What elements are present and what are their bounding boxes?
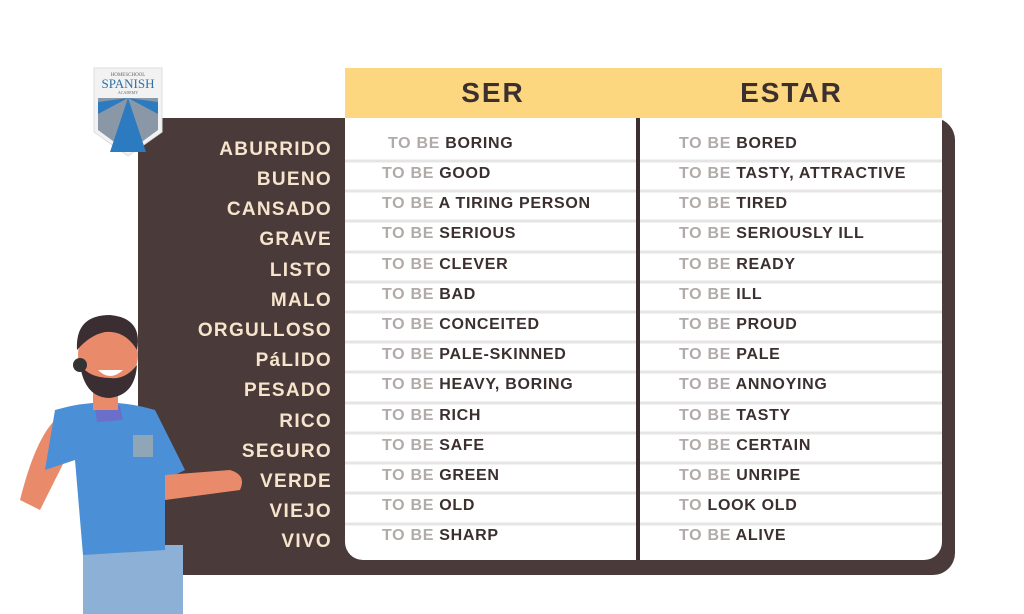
- logo shield: HOMESCHOOL: [111, 73, 145, 78]
- estar meanings: TO BE CERTAIN: [679, 437, 811, 454]
- ser meanings: [382, 135, 591, 544]
- header bar: [345, 68, 942, 118]
- estar meanings: TO BE READY: [679, 256, 796, 273]
- spanish words: RICO: [279, 411, 332, 432]
- ser meanings: TO BE BAD: [382, 286, 476, 303]
- ser meanings: TO BE OLD: [382, 497, 475, 514]
- logo shield: SPANISH: [102, 76, 154, 91]
- ser meanings: TO BE CLEVER: [382, 256, 508, 273]
- ser meanings: TO BE A TIRING PERSON: [382, 195, 591, 212]
- table body: [345, 118, 942, 560]
- spanish words: MALO: [271, 290, 332, 311]
- ser meanings: TO BE RICH: [382, 407, 481, 424]
- estar meanings: TO BE TIRED: [679, 195, 788, 212]
- estar meanings: TO BE TASTY, ATTRACTIVE: [679, 165, 906, 182]
- estar meanings: TO BE ALIVE: [679, 527, 786, 544]
- spanish words: VIEJO: [270, 501, 332, 522]
- estar meanings: TO BE TASTY: [679, 407, 791, 424]
- spanish words: ABURRIDO: [219, 139, 332, 160]
- spanish words: VERDE: [260, 471, 332, 492]
- spanish words: VIVO: [281, 531, 332, 552]
- logo shield: [94, 68, 162, 156]
- spanish words: SEGURO: [242, 441, 332, 462]
- estar meanings: TO BE ILL: [679, 286, 762, 303]
- ser meanings: TO BE GREEN: [382, 467, 500, 484]
- ser meanings: TO BE SAFE: [382, 437, 485, 454]
- estar meanings: TO LOOK OLD: [679, 497, 798, 514]
- estar meanings: TO BE PROUD: [679, 316, 798, 333]
- estar meanings: [679, 135, 906, 544]
- spanish words: PESADO: [244, 380, 332, 401]
- ser meanings: TO BE SHARP: [382, 527, 499, 544]
- spanish words: LISTO: [270, 260, 332, 281]
- ser meanings: TO BE PALE-SKINNED: [382, 346, 566, 363]
- spanish words: PáLIDO: [256, 350, 332, 371]
- ser meanings: TO BE CONCEITED: [382, 316, 540, 333]
- spanish words: CANSADO: [227, 199, 332, 220]
- header: ESTAR: ESTAR: [740, 77, 843, 108]
- ser meanings: TO BE BORING: [388, 135, 513, 152]
- header: SER: SER: [461, 77, 525, 108]
- spanish words: BUENO: [257, 169, 332, 190]
- ser meanings: TO BE HEAVY, BORING: [382, 376, 573, 393]
- ser meanings: TO BE GOOD: [382, 165, 491, 182]
- spanish words: ORGULLOSO: [198, 320, 332, 341]
- logo shield: ACADEMY: [118, 90, 138, 95]
- estar meanings: TO BE BORED: [679, 135, 798, 152]
- estar meanings: TO BE SERIOUSLY ILL: [679, 225, 864, 242]
- estar meanings: TO BE UNRIPE: [679, 467, 801, 484]
- ser meanings: TO BE SERIOUS: [382, 225, 516, 242]
- spanish words: GRAVE: [259, 229, 332, 250]
- estar meanings: TO BE PALE: [679, 346, 781, 363]
- estar meanings: TO BE ANNOYING: [679, 376, 828, 393]
- character: teacher: [20, 315, 242, 614]
- brown panel: [138, 118, 955, 575]
